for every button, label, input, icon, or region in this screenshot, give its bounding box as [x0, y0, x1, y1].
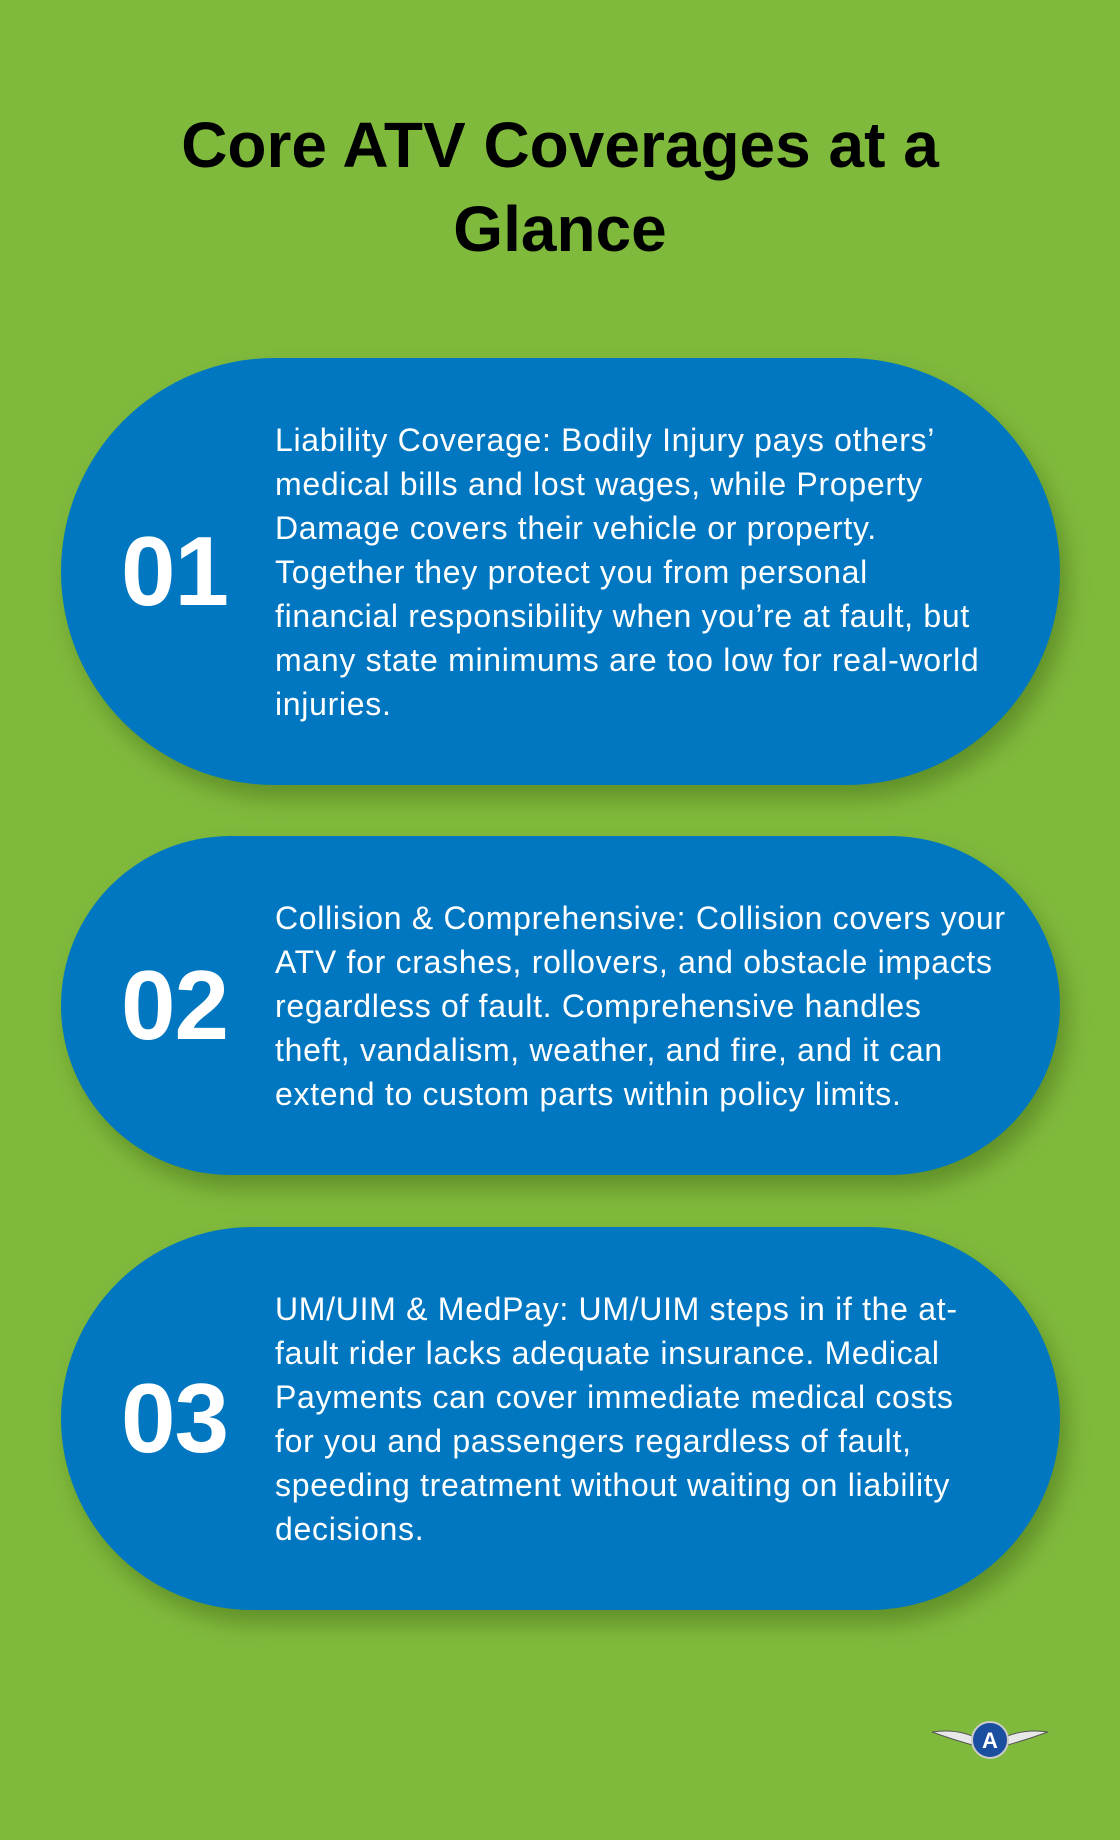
text: liability: injuries.	[275, 686, 392, 722]
text: UM/UIM: UM/UIM & MedPay: UM/UIM steps in if the at-	[275, 1290, 958, 1326]
title: Glance	[453, 193, 667, 265]
text: collision: Collision & Comprehensive: Collision covers your	[275, 900, 1006, 936]
number 01: 01	[121, 516, 228, 626]
text: liability: Damage covers their vehicle or property.	[275, 510, 877, 546]
text: collision: ATV for crashes, rollovers, and obstacle impacts	[275, 944, 993, 980]
text: liability: many state minimums are too low for real-world	[275, 642, 979, 678]
text: UM/UIM: decisions.	[275, 1510, 424, 1546]
panel: 01 liability	[61, 358, 1060, 785]
text: UM/UIM: speeding treatment without waiting on liability	[275, 1466, 950, 1502]
title	[181, 109, 940, 265]
text: UM/UIM: Payments can cover immediate medical costs	[275, 1378, 954, 1414]
text: collision: extend to custom parts within policy limits.	[275, 1076, 902, 1112]
title: Core ATV Coverages at a	[181, 109, 939, 181]
icon: logo: A	[982, 1728, 998, 1753]
text: liability: medical bills and lost wages, while Property	[275, 466, 923, 502]
text: liability: financial responsibility when you’re at fault, but	[275, 598, 970, 634]
number 02: 02	[121, 950, 228, 1060]
text: liability: Liability Coverage: Bodily Injury pays others’	[275, 422, 935, 458]
text: collision: theft, vandalism, weather, and fire, and it can	[275, 1032, 943, 1068]
text: liability	[275, 422, 979, 722]
text: UM/UIM: for you and passengers regardless of fault,	[275, 1422, 912, 1458]
text: UM/UIM: fault rider lacks adequate insurance. Medical	[275, 1334, 940, 1370]
text: collision: regardless of fault. Comprehensive handles	[275, 988, 922, 1024]
text: UM/UIM	[275, 1290, 958, 1546]
text: collision	[275, 900, 1006, 1112]
panel: 02 collision	[61, 836, 1060, 1175]
text: liability: Together they protect you from personal	[275, 554, 868, 590]
icon: logo	[932, 1721, 1048, 1759]
panel: 03 UM/UIM	[61, 1227, 1060, 1610]
number 03: 03	[121, 1363, 228, 1473]
